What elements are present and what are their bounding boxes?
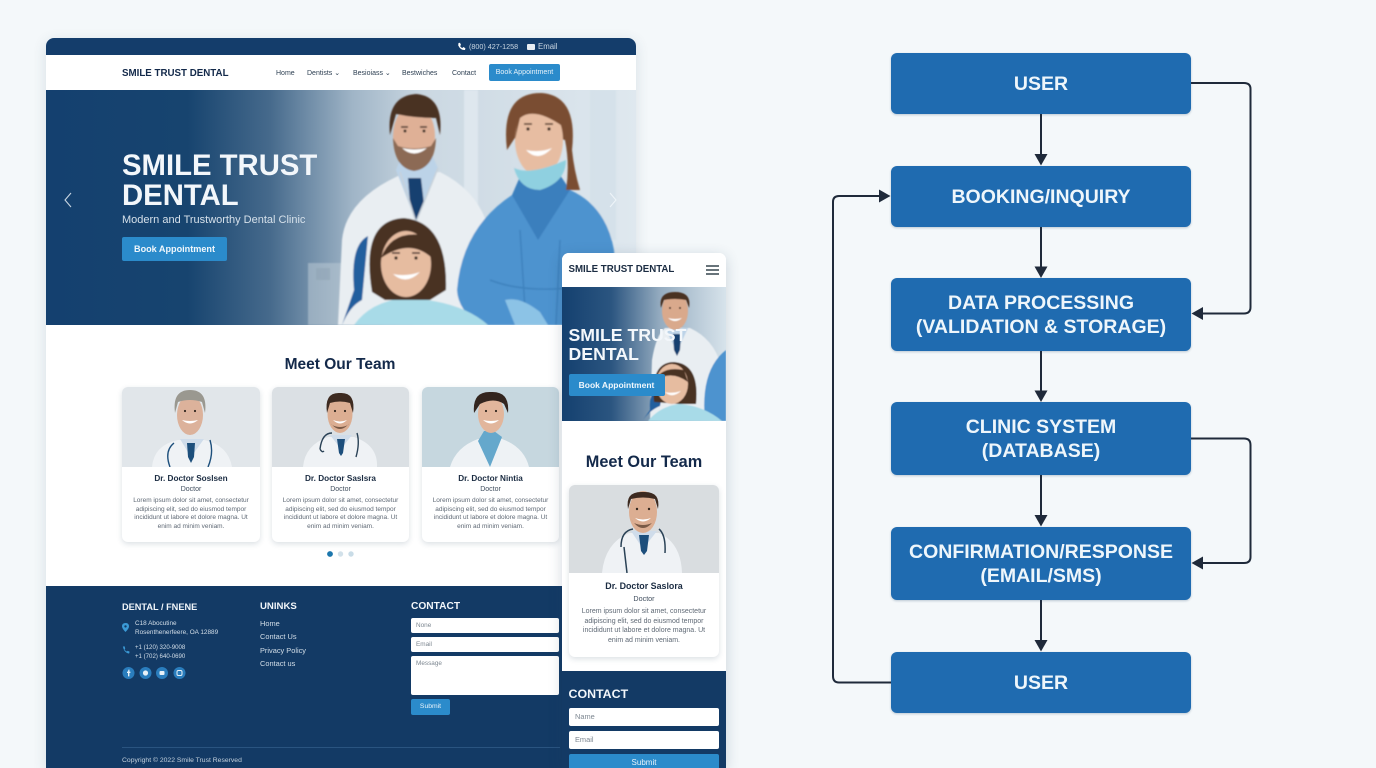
flow box: confirmation: CONFIRMATION/RESPONSE — [909, 541, 1173, 563]
footer links — [260, 619, 306, 668]
phone numbers: +1 (702) 640-0690 — [135, 653, 185, 660]
doctor name 2: Dr. Doctor Saslsra — [305, 474, 376, 483]
desktop website mockup — [46, 38, 636, 768]
flow box: data processing — [891, 278, 1191, 351]
icon: location pin — [122, 623, 129, 632]
nav button — [489, 64, 560, 81]
mobile hero photo illustration — [562, 287, 726, 421]
doctor bio 3: Lorem ipsum dolor sit amet, consectetur — [433, 497, 548, 504]
mobile logo: SMILE TRUST DENTAL — [568, 264, 674, 275]
patient — [354, 298, 488, 325]
arrow: user to booking — [1034, 114, 1048, 166]
doctor role 2: Doctor — [330, 486, 351, 493]
mobile doctor bio: incididunt ut labore et dolore magna. Ut — [583, 627, 705, 634]
mobile doctor bio — [582, 608, 706, 644]
name input — [411, 618, 559, 633]
footer links: Privacy Policy — [260, 646, 306, 655]
social icons — [122, 667, 186, 679]
carousel dots — [327, 551, 354, 557]
flow box: booking: BOOKING/INQUIRY — [951, 186, 1131, 208]
team card 3 — [422, 387, 559, 542]
mobile doctor bio: enim ad minim veniam. — [608, 636, 680, 644]
nav links: Home — [276, 70, 295, 77]
address: C18 Abocutine — [135, 620, 177, 627]
arrow: confirmation to user — [1034, 600, 1048, 652]
doctor bio 3: adipiscing elit, sed do eiusmod tempor — [435, 506, 546, 513]
flow box: final user — [891, 652, 1191, 713]
mobile name input — [569, 708, 719, 726]
submit button: Submit — [420, 703, 441, 710]
team heading: Meet Our Team — [285, 356, 395, 373]
doctor bio 2: enim ad minim veniam. — [307, 523, 374, 530]
doctor role 3: Doctor — [480, 486, 501, 493]
address: Rosenthenerfeere, OA 12889 — [135, 629, 218, 636]
doctor bio 2: incididunt ut labore et dolore magna. Ut — [284, 514, 397, 521]
arrow: user loop back to booking — [833, 190, 891, 682]
chair — [342, 236, 368, 325]
hero title — [122, 149, 317, 212]
footer column: links — [260, 601, 306, 668]
doctor bio 1: incididunt ut labore et dolore magna. Ut — [134, 514, 248, 521]
flow box: user: USER — [1014, 73, 1068, 95]
flowchart — [832, 82, 1252, 684]
footer contact form — [411, 601, 559, 715]
footer links: Contact us — [260, 659, 295, 668]
doctor bio 2: adipiscing elit, sed do eiusmod tempor — [285, 506, 396, 513]
address — [135, 620, 218, 636]
arrow: clinic system loop to confirmation — [1191, 438, 1250, 570]
logo: SMILE TRUST DENTAL — [122, 68, 229, 79]
mobile hero — [562, 287, 726, 421]
hero photo illustration — [46, 90, 684, 679]
flow box: clinic system: (DATABASE) — [982, 440, 1100, 462]
phone numbers — [135, 644, 185, 660]
doctor bio 1: Lorem ipsum dolor sit amet, consectetur — [133, 497, 249, 504]
doctor bio 3: enim ad minim veniam. — [457, 523, 524, 530]
mobile email input — [569, 731, 719, 748]
footer links: Home — [260, 619, 280, 628]
mobile submit button — [569, 754, 719, 768]
mobile name input: Name — [575, 712, 595, 721]
carousel arrow left — [65, 193, 71, 207]
mobile submit button: Submit — [632, 758, 656, 767]
footer heading: dental: DENTAL / FNENE — [122, 602, 197, 612]
flowchart connectors — [832, 82, 1252, 684]
nav links — [276, 70, 476, 77]
flow box: booking — [891, 166, 1191, 227]
message input: Message — [416, 660, 442, 667]
nav links: Besioiass ⌄ — [353, 70, 391, 77]
doctor bio 1: enim ad minim veniam. — [158, 523, 224, 530]
flow box: confirmation — [891, 527, 1191, 600]
doctor bio 2 — [283, 497, 398, 530]
doctor photo 3 — [422, 387, 559, 467]
doctor role 1: Doctor — [181, 486, 201, 493]
hero button: Book Appointment — [134, 244, 215, 254]
arrow: clinic system to confirmation — [1034, 475, 1048, 526]
mobile doctor name: Dr. Doctor Saslora — [605, 581, 683, 591]
icon: phone — [458, 42, 466, 50]
message input — [411, 656, 559, 695]
mobile team heading: Meet Our Team — [586, 453, 702, 471]
mobile hero title: SMILE TRUST — [568, 325, 686, 345]
nav links: Contact — [452, 70, 476, 77]
hero subtitle: Modern and Trustworthy Dental Clinic — [122, 214, 305, 226]
copyright: Copyright © 2022 Smile Trust Reserved — [122, 757, 242, 764]
flow box: clinic system: CLINIC SYSTEM — [966, 416, 1116, 438]
mobile doctor bio: adipiscing elit, sed do eiusmod tempor — [584, 618, 704, 624]
mobile doctor photo — [569, 485, 719, 573]
mobile hero title — [568, 325, 686, 364]
team card 1 — [122, 387, 260, 542]
doctor bio 1 — [133, 497, 249, 530]
mobile website mockup — [562, 253, 726, 768]
nav links: Bestwiches — [402, 70, 437, 77]
footer divider — [122, 747, 560, 748]
mobile email input: Email — [575, 735, 593, 744]
top contact bar — [46, 38, 636, 55]
nav links: Dentists ⌄ — [307, 70, 340, 77]
hero button — [122, 237, 227, 261]
flow box: confirmation: (EMAIL/SMS) — [980, 565, 1102, 587]
man — [338, 172, 500, 325]
doctor name 3: Dr. Doctor Nintia — [458, 474, 523, 483]
mobile hero title: DENTAL — [568, 344, 639, 364]
phone number: (800) 427-1258 — [469, 42, 518, 51]
email label: Email — [538, 42, 558, 51]
flow box: final user: USER — [1014, 672, 1068, 694]
doctor bio 3 — [433, 497, 548, 530]
phone numbers: +1 (120) 320-9008 — [135, 644, 185, 651]
hero banner — [46, 90, 636, 325]
footer links: Contact Us — [260, 632, 297, 641]
email input — [411, 637, 559, 652]
carousel arrow right — [610, 193, 616, 207]
hero title: SMILE TRUST — [122, 149, 317, 182]
desktop footer — [46, 586, 636, 768]
doctor photo 1 — [122, 387, 260, 467]
mobile header — [562, 253, 726, 287]
doctor bio 3: incididunt ut labore et dolore magna. Ut — [434, 514, 547, 521]
mobile footer — [562, 671, 726, 768]
mobile contact heading: CONTACT — [568, 687, 628, 701]
flow box: data processing: DATA PROCESSING — [948, 292, 1134, 314]
doctor name 1: Dr. Doctor Soslsen — [154, 474, 228, 483]
icon: hamburger menu — [706, 265, 719, 275]
flow box: user — [891, 53, 1191, 114]
arrow: data processing to clinic system — [1034, 351, 1048, 402]
icon: email — [527, 44, 535, 50]
mobile doctor role: Doctor — [633, 594, 655, 603]
arrow: booking to data processing — [1034, 227, 1048, 278]
mobile team card — [569, 485, 719, 657]
navigation bar — [46, 55, 636, 90]
doctor photo 2 — [272, 387, 409, 467]
footer heading: contact: CONTACT — [411, 601, 460, 612]
email input: Email — [416, 641, 432, 648]
flow box: clinic system — [891, 402, 1191, 475]
hero title: DENTAL — [122, 179, 239, 212]
nav button: Book Appointment — [496, 68, 553, 76]
mobile hero button: Book Appointment — [579, 380, 654, 390]
team card 2 — [272, 387, 409, 542]
arrow: user loop to data processing — [1191, 83, 1250, 320]
submit button — [411, 699, 450, 715]
doctor bio 2: Lorem ipsum dolor sit amet, consectetur — [283, 497, 398, 504]
mobile doctor bio: Lorem ipsum dolor sit amet, consectetur — [582, 608, 706, 615]
footer heading: links: UNINKS — [260, 601, 297, 612]
name input: None — [416, 622, 431, 629]
doctor bio 1: adipiscing elit, sed do eiusmod tempor — [136, 506, 246, 513]
mobile hero button — [568, 374, 664, 396]
icon: phone — [122, 646, 130, 654]
footer column: dental info — [122, 602, 218, 679]
flow box: data processing: (VALIDATION & STORAGE) — [916, 316, 1166, 338]
woman — [457, 190, 620, 325]
